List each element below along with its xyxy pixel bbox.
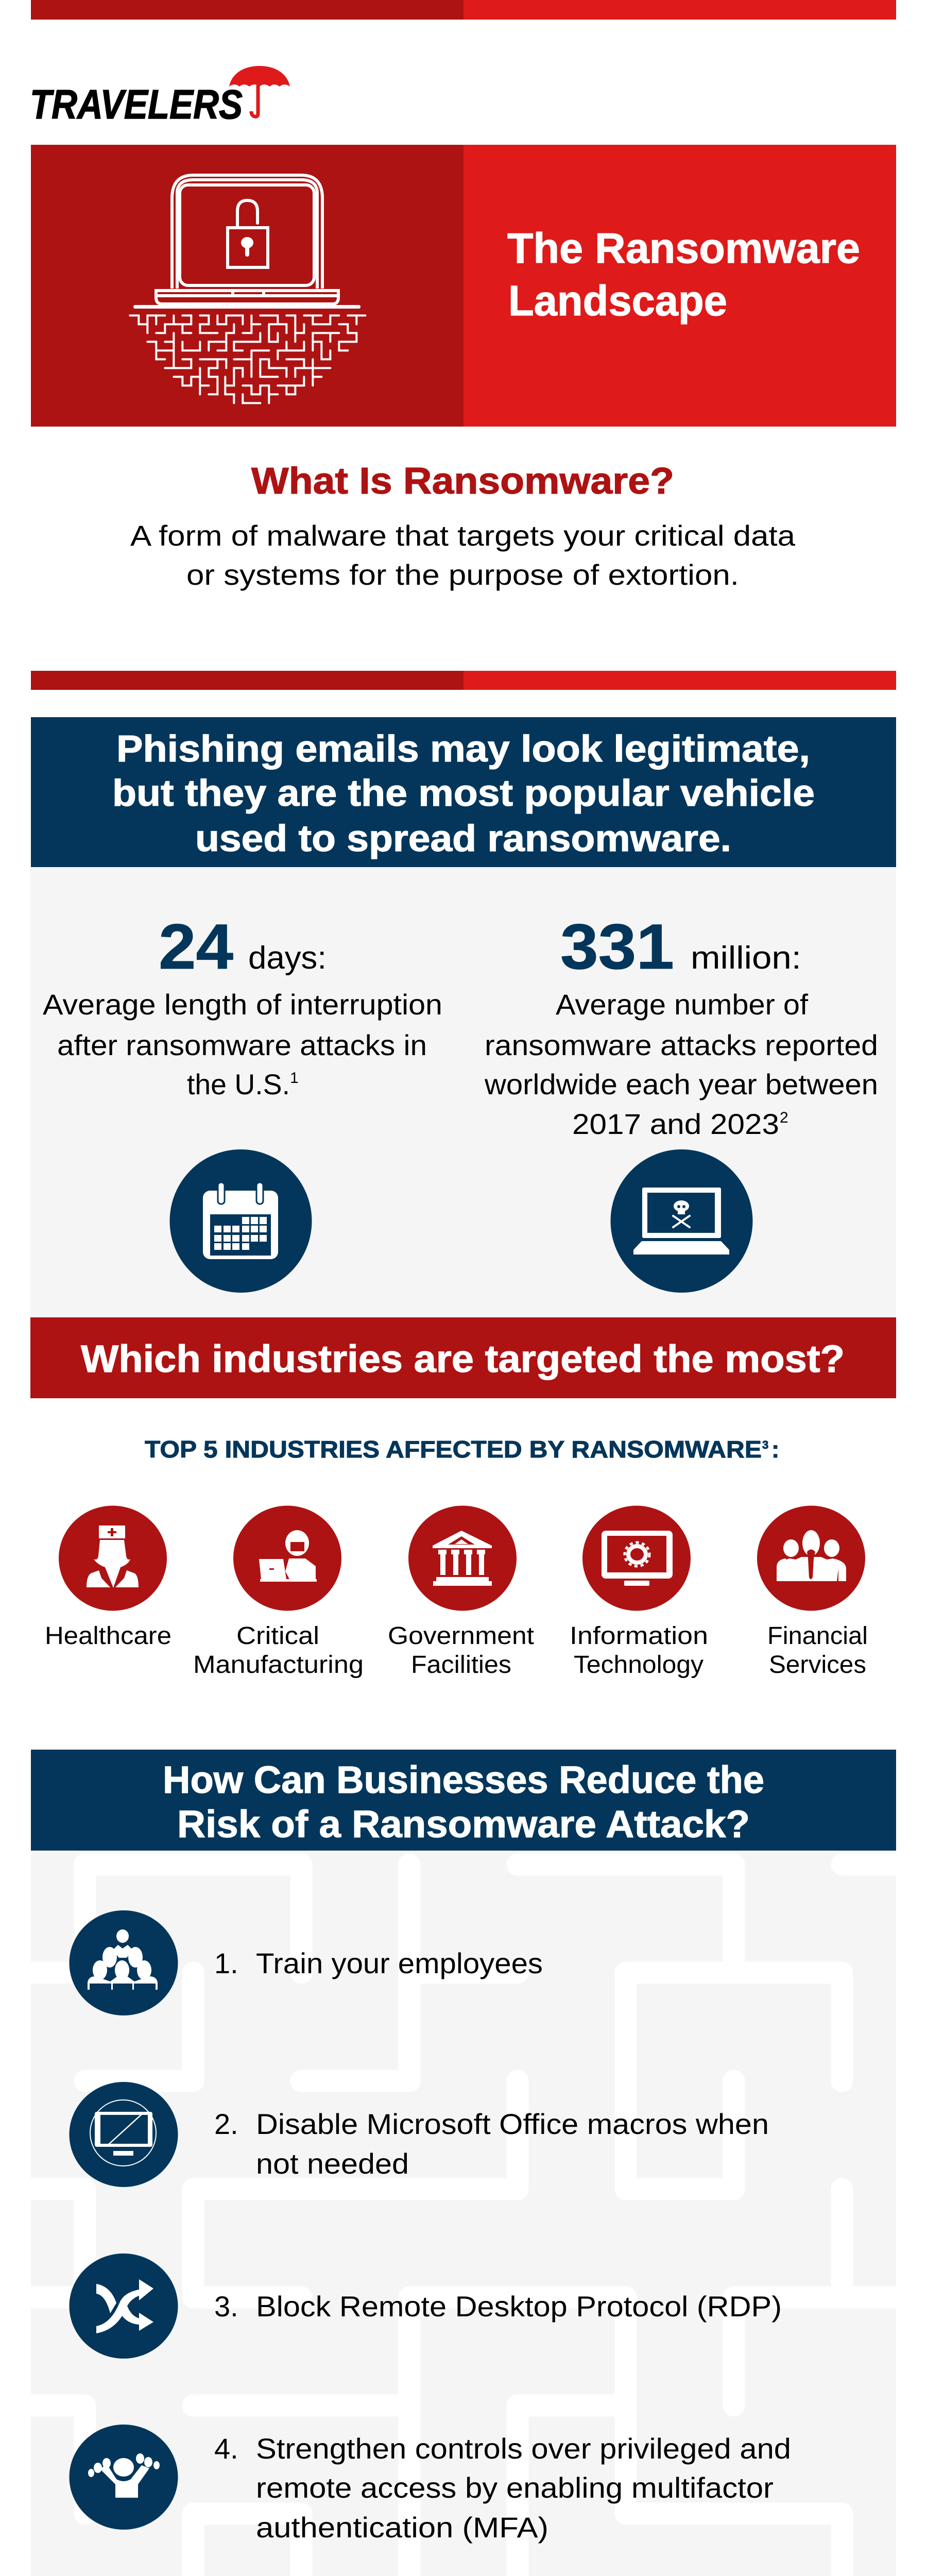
hero panel <box>31 145 896 427</box>
banner: how can businesses reduce the risk: How Can Businesses Reduce the <box>163 1758 764 1801</box>
step 1: train your employees <box>69 1910 543 2015</box>
definition text: A form of malware that targets your critical data <box>130 519 796 552</box>
industry: information technology: Information <box>570 1622 708 1650</box>
stat: 331 million: worldwide each year between <box>484 1068 878 1100</box>
industry: critical manufacturing: Manufacturing <box>193 1651 364 1679</box>
stat: 331 million: million: <box>691 940 801 976</box>
step 3: block RDP: Block Remote Desktop Protocol (RDP) <box>256 2290 782 2323</box>
icon: person lifting weights <box>69 2425 178 2530</box>
industry: critical manufacturing <box>193 1505 364 1679</box>
industry: financial services: Services <box>769 1651 866 1679</box>
stat: 24 days: Average length of interruption <box>43 988 442 1021</box>
industry: healthcare <box>45 1505 171 1650</box>
industry: government facilities: Government <box>388 1622 534 1650</box>
banner: how can businesses reduce the risk: Risk of a Ransomware Attack? <box>177 1803 750 1845</box>
definition text <box>130 519 796 591</box>
banner: phishing <box>31 717 896 867</box>
step 2: disable macros: Disable Microsoft Office macros when <box>256 2108 769 2140</box>
step 4: strengthen controls: 4. <box>214 2432 238 2465</box>
stat: 331 million: Average number of <box>556 988 808 1021</box>
step 4: strengthen controls: Strengthen controls over privileged and <box>256 2432 791 2465</box>
icon: disabled monitor <box>69 2082 178 2187</box>
industry: information technology: Technology <box>574 1651 703 1679</box>
panel: statistics <box>30 867 896 1317</box>
step 1: train your employees: Train your employees <box>256 1947 543 1979</box>
stat: 331 million: ransomware attacks reported <box>485 1029 878 1061</box>
panel: risk reduction steps <box>10 1851 922 2576</box>
stat: 24 days: 1 <box>290 1070 299 1087</box>
top colour bar <box>31 0 896 20</box>
step 4: strengthen controls <box>69 2425 791 2544</box>
industry: government facilities: Facilities <box>411 1651 511 1679</box>
step 2: disable macros: not needed <box>256 2147 409 2180</box>
step 3: block RDP: 3. <box>214 2290 238 2323</box>
stat: 331 million <box>484 911 878 1140</box>
industry: information technology <box>570 1505 708 1679</box>
step 4: strengthen controls: remote access by enabling multifactor <box>256 2471 774 2504</box>
industry: government facilities <box>388 1505 534 1679</box>
step 3: block RDP <box>69 2253 782 2359</box>
banner: which industries: Which industries are targeted the most? <box>81 1337 845 1380</box>
icon: group of people <box>69 1910 178 2015</box>
stat: 24 days: 24 <box>159 911 233 982</box>
industry: healthcare: Healthcare <box>45 1622 171 1650</box>
stat: 331 million: 2 <box>780 1109 788 1126</box>
title: The Ransomware <box>507 224 860 272</box>
industry: critical manufacturing: Critical <box>236 1622 319 1650</box>
industry: financial services <box>757 1505 868 1679</box>
step 4: strengthen controls: authentication (MFA) <box>256 2511 548 2544</box>
Travelers logo: TRAVELERS <box>30 81 243 127</box>
banner: phishing: but they are the most popular vehicle <box>112 773 815 814</box>
stat: 24 days: after ransomware attacks in <box>57 1029 427 1061</box>
banner: how can businesses reduce the risk <box>31 1750 896 1851</box>
stat: 331 million: 331 <box>560 911 674 982</box>
step 1: train your employees: 1. <box>214 1947 238 1979</box>
banner: phishing: Phishing emails may look legitimate, <box>116 728 810 770</box>
banner: phishing: used to spread ransomware. <box>195 818 731 859</box>
divider colour bar <box>31 671 896 690</box>
stat: 24 days: days: <box>248 940 327 976</box>
title <box>507 224 860 325</box>
step 2: disable macros <box>69 2082 769 2187</box>
step 2: disable macros: 2. <box>214 2108 238 2140</box>
icon: crossed arrows <box>69 2253 178 2359</box>
stat: 331 million: 2017 and 2023 <box>572 1108 779 1140</box>
definition text: or systems for the purpose of extortion. <box>186 558 739 591</box>
subheading: top 5 industries: : <box>771 1436 779 1463</box>
icon: laptop with padlock over maze <box>130 175 365 403</box>
industry: financial services: Financial <box>767 1622 868 1650</box>
banner: which industries <box>30 1317 896 1398</box>
icon: laptop with skull <box>611 1149 753 1293</box>
stat: 24 days: the U.S. <box>187 1068 290 1100</box>
icon: calendar <box>170 1149 312 1293</box>
stat: 24 days <box>43 911 442 1100</box>
title: Landscape <box>508 277 727 325</box>
subheading: top 5 industries: 3 <box>762 1438 768 1451</box>
heading: what is ransomware: What Is Ransomware? <box>251 461 674 502</box>
subheading: top 5 industries: TOP 5 INDUSTRIES AFFECTED BY RANSOMWARE <box>145 1436 762 1463</box>
